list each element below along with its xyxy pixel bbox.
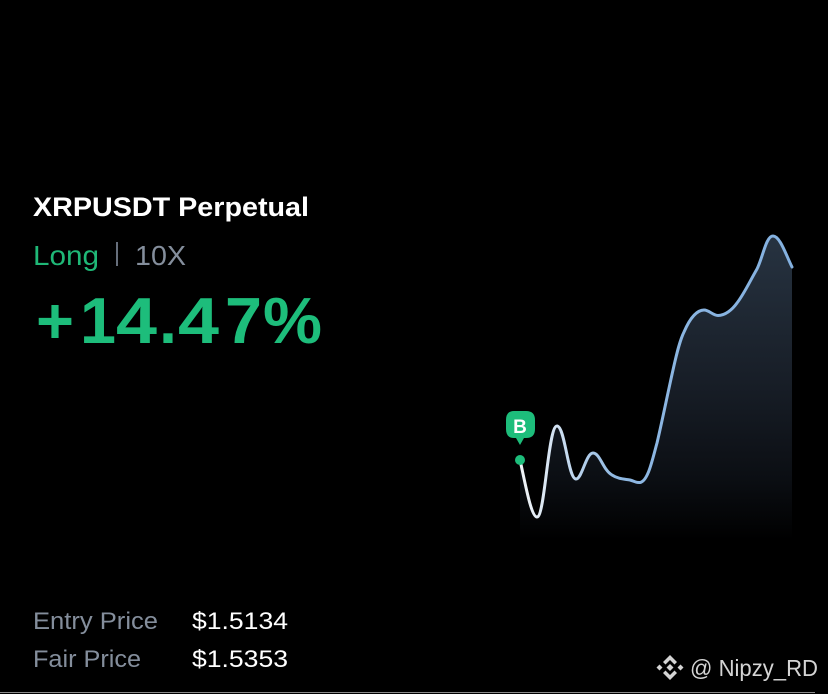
- profit percentage: 1: [80, 284, 116, 357]
- entry point dot: [515, 455, 525, 465]
- buy marker letter: B: [513, 417, 527, 438]
- chart price line: [520, 236, 792, 517]
- profit percentage: .: [159, 284, 177, 357]
- buy marker: [506, 411, 535, 445]
- title: XRPUSDT Perpetual: [33, 192, 309, 222]
- side label: Long: Long: [33, 240, 99, 271]
- watermark: [656, 655, 818, 681]
- icon: binance diamond logo: [656, 655, 684, 680]
- profit percentage: 4: [116, 284, 157, 357]
- fair price label: Fair Price: [33, 646, 141, 673]
- leverage label: 10X: 10X: [135, 240, 186, 271]
- chart area fill: [520, 236, 792, 540]
- entry price value: $1.5134: [192, 608, 288, 635]
- profit percentage: [36, 284, 322, 357]
- watermark handle: @ Nipzy_RD: [690, 655, 818, 681]
- profit percentage: 4: [178, 284, 219, 357]
- price details: [33, 608, 288, 673]
- profit percentage: +: [36, 284, 74, 357]
- entry price label: Entry Price: [33, 608, 158, 635]
- fair price value: $1.5353: [192, 646, 288, 673]
- price line chart: [506, 236, 792, 540]
- profit percentage: 7: [225, 284, 262, 357]
- position side and leverage: [33, 240, 186, 271]
- profit percentage: %: [263, 284, 322, 357]
